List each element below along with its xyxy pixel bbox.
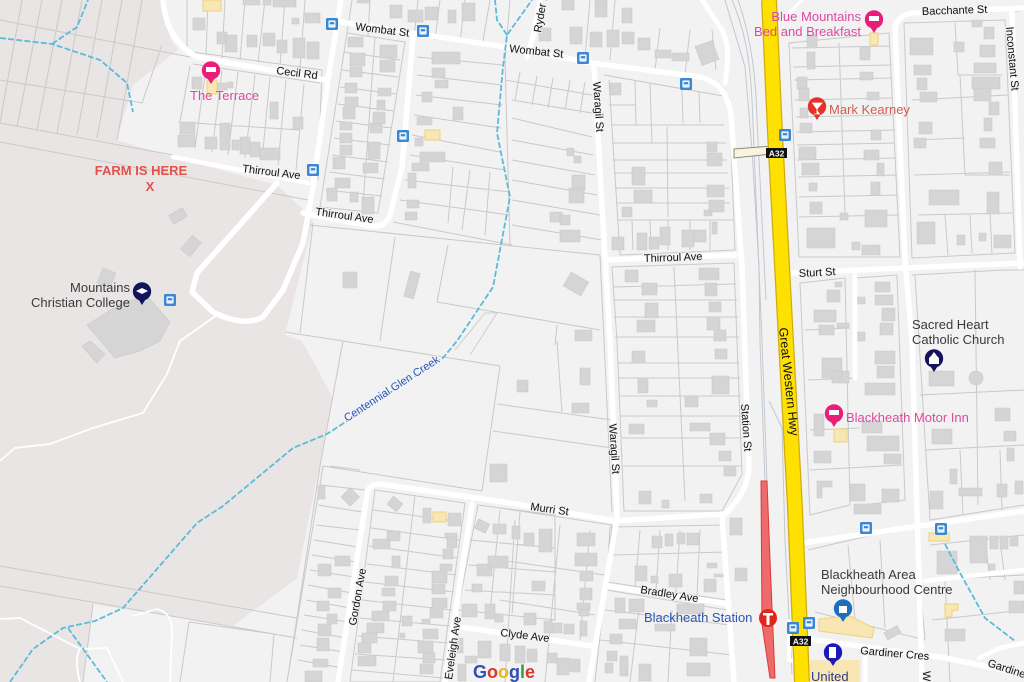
pin: Blue Mountains Bed and Breakfast: Bed and Breakfast: [754, 24, 861, 39]
street name labels: Gordon Ave: [347, 567, 369, 627]
pin: Blackheath Station: [644, 609, 777, 627]
footpaths: [0, 315, 217, 682]
creek name label: Centennial Glen Creek: [342, 354, 442, 425]
street name labels: Clyde Ave: [500, 627, 550, 645]
farm location annotation: [95, 163, 188, 194]
street name labels: Waragil St: [606, 423, 621, 474]
pin: Sacred Heart Catholic Church: [912, 317, 1004, 372]
pin: Blackheath Area Neighbourhood Centre: Neighbourhood Centre: [821, 582, 953, 597]
parcel outline at creek: [455, 313, 497, 355]
street name labels: W: [920, 671, 932, 682]
pin: Blackheath Motor Inn: Blackheath Motor Inn: [846, 410, 969, 425]
pin: Blackheath Area Neighbourhood Centre: Blackheath Area: [821, 567, 916, 582]
street name labels: Gardiner Cres: [860, 645, 930, 663]
street name labels: Inconstant St: [1003, 26, 1021, 91]
pin: The Terrace: [190, 61, 259, 103]
street name labels: Great Western Hwy: [776, 327, 801, 437]
street name labels: Thirroul Ave: [242, 163, 301, 182]
pin: The Terrace: The Terrace: [190, 88, 259, 103]
A32 shield north: A32: [769, 148, 785, 158]
street name labels: Bacchante St: [922, 4, 988, 18]
road bridge over railway: [734, 146, 772, 158]
street name labels: Station St: [738, 403, 753, 452]
street name labels: [242, 0, 1024, 682]
commercial building footprints: [203, 0, 958, 682]
pin: Mountains Christian College: [31, 280, 151, 310]
street name labels: Cecil Rd: [276, 65, 318, 82]
pin: Blue Mountains Bed and Breakfast: [754, 9, 883, 39]
Great Western Highway: [769, 0, 802, 682]
pin: Blackheath Station: Blackheath Station: [644, 610, 752, 625]
pin: Mark Kearney: [808, 97, 910, 120]
pin: Mark Kearney: Mark Kearney: [829, 102, 910, 117]
pin: Mountains Christian College: Christian College: [31, 295, 130, 310]
pin: United petrol station: [811, 643, 849, 682]
pin: Blue Mountains Bed and Breakfast: Blue Mountains: [771, 9, 861, 24]
railway lines: [725, 0, 792, 674]
rotated buildings: [82, 41, 983, 640]
pin: Sacred Heart Catholic Church: Catholic Church: [912, 332, 1004, 347]
street name labels: Sturt St: [799, 266, 836, 280]
street name labels: Murri St: [530, 501, 569, 518]
pin: Blackheath Motor Inn: [825, 404, 969, 427]
street name labels: Thirroul Ave: [315, 206, 374, 226]
pin: Mountains Christian College: Mountains: [70, 280, 130, 295]
street name labels: Wombat St: [509, 43, 564, 61]
farm and bushland area: [0, 0, 333, 682]
street name labels: Wombat St: [355, 21, 410, 40]
street name labels: Waragil St: [590, 81, 605, 132]
bus stop icons: [164, 18, 947, 634]
farm location annotation: FARM IS HERE: [95, 163, 188, 178]
farm location annotation: X: [146, 179, 155, 194]
street name labels: Eveleigh Ave: [443, 616, 464, 680]
Google logo: Google: [473, 662, 535, 682]
street name labels: Bradley Ave: [640, 584, 699, 605]
station platform: [761, 481, 775, 678]
A32 shield south: A32: [793, 636, 809, 646]
pin: Sacred Heart Catholic Church: Sacred Heart: [912, 317, 989, 332]
pin: Blackheath Area Neighbourhood Centre: [821, 567, 953, 622]
street name labels: Thirroul Ave: [644, 251, 703, 265]
